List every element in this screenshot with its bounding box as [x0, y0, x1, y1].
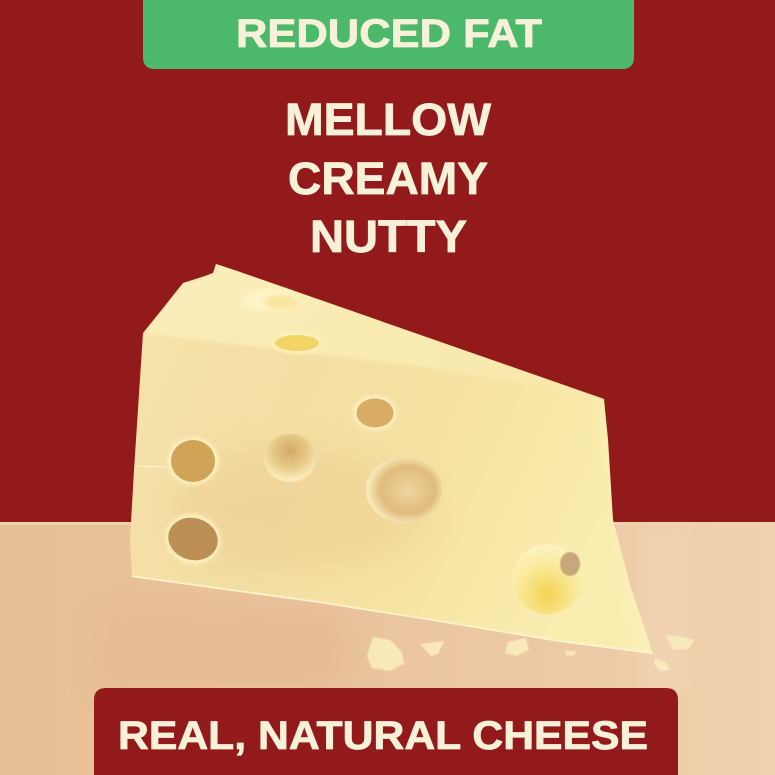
wedge top face — [143, 260, 610, 399]
hole 4 — [167, 437, 219, 485]
flavor descriptors: CREAMY — [288, 153, 488, 204]
flavor descriptors — [285, 94, 492, 262]
dimple 1 — [264, 434, 316, 482]
hole 5 — [159, 508, 227, 570]
banner text: REAL, NATURAL CHEESE — [118, 714, 648, 758]
red banner: real natural cheese — [94, 688, 678, 775]
flavor descriptors: NUTTY — [310, 211, 467, 262]
cheese crumbs — [367, 635, 695, 671]
flavor descriptors: MELLOW — [285, 94, 492, 145]
green banner: reduced fat — [143, 0, 634, 69]
soft highlight on right edge — [604, 400, 614, 522]
cheese wedge — [120, 255, 660, 665]
yellow hole — [512, 544, 582, 614]
top hole 2 — [272, 332, 322, 354]
crack — [136, 466, 168, 467]
dimple 2 — [366, 457, 442, 523]
background: wooden table — [0, 522, 775, 775]
shading on front face — [184, 464, 412, 558]
cheese base shape — [120, 255, 660, 665]
banner text: REDUCED FAT — [236, 12, 542, 56]
top hole 1 — [241, 288, 299, 312]
hole 3 — [353, 395, 397, 431]
bottom rind — [132, 577, 653, 654]
background: red wall — [0, 0, 775, 522]
